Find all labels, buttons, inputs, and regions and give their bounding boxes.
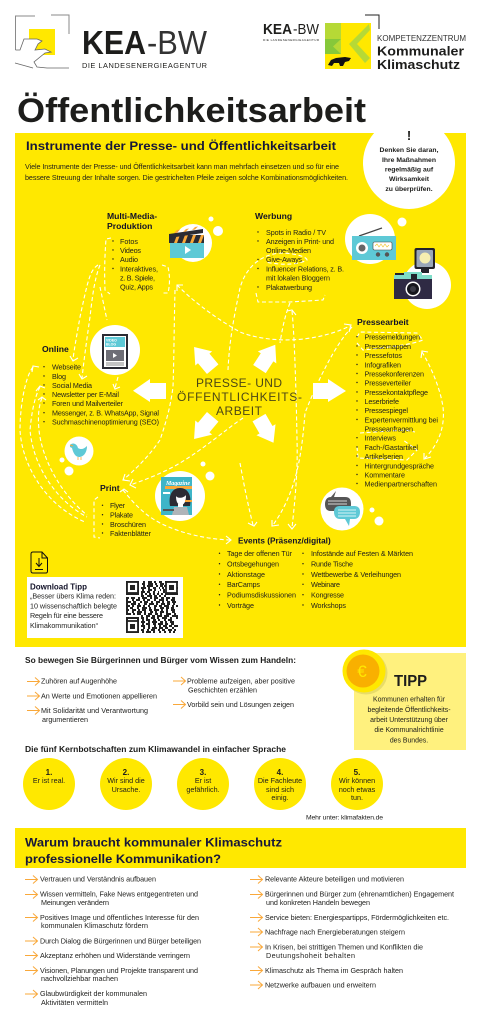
list: knowledge to action: Vorbild sein und Lösungen zeigen bbox=[187, 700, 294, 709]
download tip box: 10 wissenschaftlich belegte bbox=[30, 602, 117, 610]
section: Pressearbeit: Artikelserien bbox=[364, 452, 403, 461]
download tip box bbox=[27, 577, 183, 638]
section: Pressearbeit: Pressekonferenzen bbox=[364, 369, 424, 378]
icon: magazine: Magazine bbox=[165, 481, 190, 487]
core message 5 bbox=[331, 758, 383, 810]
section: Pressearbeit: Pressekontaktpflege bbox=[364, 388, 428, 397]
core message 3 bbox=[177, 758, 229, 810]
section: Werbung: Anzeigen in Print- und bbox=[266, 237, 334, 246]
list: knowledge to action bbox=[27, 677, 295, 724]
section: Events: Infostände auf Festen & Märkten bbox=[311, 549, 413, 558]
list: reasons left: Durch Dialog die Bürgerinnen und Bürger beteiligen bbox=[40, 936, 201, 945]
section: Print: Faktenblätter bbox=[110, 529, 152, 538]
panel: why communication heading: professionelle Kommunikation? bbox=[25, 852, 221, 866]
section: Pressearbeit: Pressespiegel bbox=[364, 406, 408, 415]
list: reasons left: kommunalen Klimaschutz fördern bbox=[41, 921, 148, 930]
tip box: begleitende Öffentlichkeits- bbox=[368, 706, 450, 714]
section: Events: Tage der offenen Tür bbox=[227, 549, 293, 558]
core message 2: Wir sind die bbox=[107, 776, 145, 785]
section: Online: Messenger, z. B. WhatsApp, Signal bbox=[52, 408, 159, 418]
section: Multi-Media-Produktion: z. B. Spiele, bbox=[120, 274, 155, 282]
logo: Kompetenzzentrum Kommunaler Klimaschutz: DIE LANDESENERGIEAGENTUR bbox=[263, 38, 320, 42]
list: reasons left: Glaubwürdigkeit der kommunalen bbox=[40, 989, 147, 998]
section: Pressearbeit: Medienpartnerschaften bbox=[364, 479, 437, 488]
section: Pressearbeit: Pressefotos bbox=[364, 351, 402, 360]
section: Events: Wettbewerbe & Verleihungen bbox=[311, 570, 401, 579]
section: Werbung: Werbung bbox=[255, 211, 292, 221]
section: Events: Aktionstage bbox=[227, 570, 265, 579]
section: Events: BarCamps bbox=[227, 580, 260, 589]
section: Events: Podiumsdiskussionen bbox=[227, 590, 296, 600]
core message 5: noch etwas bbox=[339, 785, 376, 794]
list: reasons right: Nachfrage nach Energieberatungen steigern bbox=[265, 928, 405, 936]
logo: Kompetenzzentrum Kommunaler Klimaschutz: Kommunaler bbox=[377, 44, 464, 58]
section: Pressearbeit: Interviews bbox=[364, 434, 396, 442]
section: Pressearbeit: Presseverteiler bbox=[364, 378, 412, 387]
callout: reminder: Wirksamkeit bbox=[389, 176, 430, 183]
panel: why communication heading bbox=[15, 828, 466, 868]
logo: KEA-BW: -BW bbox=[147, 24, 208, 61]
list: knowledge to action: argumentieren bbox=[42, 715, 88, 724]
icon: euro coin: € bbox=[357, 662, 367, 681]
core message 3: Er ist bbox=[195, 776, 211, 785]
core message 3: gefährlich. bbox=[186, 785, 220, 794]
section: Pressearbeit: Infografiken bbox=[364, 360, 401, 369]
section: Pressearbeit: Presseanfragen bbox=[364, 424, 413, 434]
title: Öffentlichkeitsarbeit bbox=[17, 92, 366, 130]
intro text: bessere Streuung der Inhalte sorgen. Die gestrichelten Pfeile zeigen solche Kombinationsmöglichkeiten. bbox=[25, 173, 348, 182]
section: Events: Events (Präsenz/digital) bbox=[238, 536, 331, 546]
icon: speech bubbles bbox=[320, 488, 384, 530]
panel heading: Instrumente der Presse- und Öffentlichkeitsarbeit bbox=[26, 140, 336, 153]
core message 4: sind sich bbox=[266, 785, 294, 794]
heading: knowledge to action: So bewegen Sie Bürgerinnen und Bürger vom Wissen zum Handeln: bbox=[25, 655, 296, 665]
section: Multi-Media-Produktion: Videos bbox=[120, 246, 141, 255]
core message 2 bbox=[100, 758, 152, 810]
core message 5: Wir können bbox=[339, 776, 375, 785]
list: knowledge to action: Probleme aufzeigen, aber positive bbox=[187, 677, 295, 686]
icon: radio bbox=[345, 214, 406, 264]
list: knowledge to action: Mit Solidarität und Verantwortung bbox=[41, 706, 148, 715]
big white arrows around centre bbox=[133, 339, 346, 448]
icon: bird bbox=[60, 436, 94, 476]
icon: video blog tablet: VIDEO bbox=[106, 338, 117, 342]
callout: reminder: Ihre Maßnahmen bbox=[382, 157, 436, 164]
core message 4: Die Fachleute bbox=[258, 776, 302, 785]
core message 2: Ursache. bbox=[112, 785, 140, 794]
section: Multi-Media-Produktion: Fotos bbox=[120, 237, 138, 246]
section: Events: Kongresse bbox=[311, 590, 344, 600]
logo: KEA-BW bbox=[15, 15, 208, 70]
centre label: ÖFFENTLICHKEITS- bbox=[177, 390, 302, 404]
section: Online: Newsletter per E-Mail bbox=[52, 390, 119, 399]
section: Events: Ortsbegehungen bbox=[227, 559, 279, 568]
download tip box: Klimakommunikation“ bbox=[30, 621, 99, 630]
list: reasons left: Akzeptanz erhöhen und Widerstände verringern bbox=[40, 951, 190, 960]
list: reasons left: Visionen, Planungen und Projekte transparent und bbox=[40, 966, 198, 975]
list: reasons right: In Krisen, bei strittigen Themen und Konflikten die bbox=[265, 942, 423, 952]
section: Werbung: Plakatwerbung bbox=[266, 283, 312, 292]
section: Online: Online bbox=[42, 344, 69, 354]
dashed arrows bbox=[20, 238, 443, 544]
section: Pressearbeit: Kommentare bbox=[364, 470, 405, 479]
icon: magazine bbox=[155, 462, 214, 521]
section: Online: Webseite bbox=[52, 362, 81, 372]
section: Pressearbeit: Expertenvermittlung bei bbox=[364, 415, 438, 424]
centre label: ARBEIT bbox=[216, 404, 263, 418]
logo: Kompetenzzentrum Kommunaler Klimaschutz: KEA bbox=[263, 21, 292, 38]
core message 4: 4. bbox=[277, 768, 283, 777]
tip box: arbeit Unterstützung über bbox=[370, 717, 449, 724]
section: Pressearbeit bbox=[356, 317, 438, 488]
section: Print: Flyer bbox=[110, 501, 126, 510]
section: Werbung bbox=[255, 211, 344, 292]
section: Print: Broschüren bbox=[110, 520, 146, 529]
section: Online bbox=[42, 344, 159, 426]
section: Werbung: mit lokalen Bloggern bbox=[266, 274, 330, 282]
section: Multi-Media-Produktion: Audio bbox=[120, 255, 138, 264]
section: Online: Suchmaschinenoptimierung (SEO) bbox=[52, 418, 159, 426]
core message 1: Er ist real. bbox=[33, 776, 65, 785]
download tip box: „Besser übers Klima reden: bbox=[30, 592, 116, 601]
section: Print bbox=[100, 483, 152, 538]
section: Pressearbeit: Fach-/Gastartikel bbox=[364, 443, 418, 452]
section: Werbung: Give-Aways bbox=[266, 255, 302, 264]
icon: video blog tablet bbox=[90, 325, 140, 375]
callout: reminder: ! bbox=[407, 128, 411, 143]
core message 2: 2. bbox=[123, 768, 129, 777]
icon: video blog tablet: BLOG bbox=[106, 342, 116, 346]
logo: Kompetenzzentrum Kommunaler Klimaschutz: KOMPETENZZENTRUM bbox=[377, 34, 466, 43]
section: Pressearbeit: Pressemeldungen bbox=[364, 332, 420, 342]
list: knowledge to action: An Werte und Emotionen appellieren bbox=[41, 691, 157, 700]
core message 5: 5. bbox=[354, 768, 360, 777]
tip box: die Kommunalrichtlinie bbox=[374, 727, 444, 734]
callout: reminder bbox=[363, 128, 455, 209]
section: Print: Plakate bbox=[110, 510, 133, 520]
icon: clapperboard bbox=[169, 216, 223, 262]
section: Events: Workshops bbox=[311, 601, 346, 610]
list: reasons left: Positives Image und öffentliches Interesse für den bbox=[40, 913, 199, 922]
list: reasons right: Service bieten: Energiespartipps, Fördermöglichkeiten etc. bbox=[265, 913, 449, 922]
core message 3: 3. bbox=[200, 768, 206, 777]
section: Werbung: Influencer Relations, z. B. bbox=[266, 264, 344, 274]
QR code bbox=[126, 582, 178, 632]
section: Pressearbeit: Pressearbeit bbox=[357, 317, 409, 327]
logo: Kompetenzzentrum Kommunaler Klimaschutz: -BW bbox=[293, 21, 320, 38]
list: reasons left: Vertrauen und Verständnis aufbauen bbox=[40, 874, 156, 884]
list: knowledge to action: Geschichten erzählen bbox=[188, 685, 257, 694]
callout: reminder: regelmäßig auf bbox=[385, 166, 434, 174]
list: reasons left: Meinungen verändern bbox=[41, 898, 109, 907]
list: reasons right bbox=[250, 874, 454, 990]
download tip box: Regeln für eine bessere bbox=[30, 611, 103, 620]
download tip box: Download Tipp bbox=[30, 582, 87, 592]
section: Print: Print bbox=[100, 483, 120, 493]
intro text bbox=[25, 162, 348, 182]
section: Online: Social Media bbox=[52, 381, 92, 390]
section: Multi-Media-Produktion: Multi-Media- bbox=[107, 211, 157, 221]
callout: reminder: Denken Sie daran, bbox=[380, 147, 439, 154]
list: reasons left: Aktivitäten vermitteln bbox=[41, 998, 108, 1007]
section: Werbung: Spots in Radio / TV bbox=[266, 228, 326, 237]
list: reasons right: Bürgerinnen und Bürger zum (ehrenamtlichen) Engagement bbox=[265, 890, 454, 898]
section: Pressearbeit: Hintergrundgespräche bbox=[364, 461, 434, 470]
list: reasons left: Wissen vermitteln, Fake News entgegentreten und bbox=[40, 890, 198, 898]
section: Multi-Media-Produktion bbox=[107, 211, 158, 292]
list: reasons right: Klimaschutz als Thema im Gespräch halten bbox=[265, 966, 403, 975]
tip box: TIPP bbox=[394, 673, 427, 690]
centre label bbox=[177, 376, 302, 418]
icon: download bbox=[31, 552, 48, 573]
logo: Kompetenzzentrum Kommunaler Klimaschutz bbox=[263, 15, 466, 72]
logo: Kompetenzzentrum Kommunaler Klimaschutz: Klimaschutz bbox=[377, 58, 460, 72]
list: reasons right: Relevante Akteure beteiligen und motivieren bbox=[265, 874, 404, 884]
list: reasons left bbox=[25, 874, 201, 1007]
section: Pressearbeit: Pressemappen bbox=[364, 342, 411, 351]
icon: camera bbox=[394, 248, 451, 309]
logo: KEA-BW: DIE LANDESENERGIEAGENTUR bbox=[82, 61, 207, 70]
section: Multi-Media-Produktion: Produktion bbox=[107, 221, 152, 231]
section: Events: Webinare bbox=[311, 580, 340, 589]
core message 4: einig. bbox=[271, 793, 289, 802]
section: Multi-Media-Produktion: Quiz, Apps bbox=[120, 282, 153, 292]
tip box: Kommunen erhalten für bbox=[373, 696, 446, 704]
list: knowledge to action: Zuhören auf Augenhöhe bbox=[41, 677, 117, 686]
tip box: des Bundes. bbox=[390, 738, 428, 744]
core message 4 bbox=[254, 758, 306, 810]
source note: Mehr unter: klimafakten.de bbox=[306, 814, 383, 822]
section: Online: Blog bbox=[52, 372, 66, 381]
panel: instruments bbox=[15, 128, 466, 647]
list: reasons left: nachvollziehbar machen bbox=[41, 974, 118, 983]
core message 1 bbox=[23, 758, 75, 810]
list: reasons right: Netzwerke aufbauen und erweitern bbox=[265, 980, 376, 990]
panel: why communication heading: Warum braucht kommunaler Klimaschutz bbox=[25, 836, 282, 850]
list: reasons right: Deutungshoheit behalten bbox=[266, 951, 355, 960]
intro text: Viele Instrumente der Presse- und Öffentlichkeitsarbeit kann man mehrfach einsetzen und so für eine bbox=[25, 162, 339, 171]
section: Multi-Media-Produktion: Interaktives, bbox=[120, 264, 158, 274]
callout: reminder: zu überprüfen. bbox=[385, 186, 433, 193]
section: Events bbox=[219, 536, 413, 610]
section: Events: Runde Tische bbox=[311, 559, 353, 568]
core message 5: tun. bbox=[351, 793, 363, 802]
tip box bbox=[342, 650, 466, 750]
section: Events: Vorträge bbox=[227, 601, 254, 610]
logo: KEA-BW: KEA bbox=[82, 24, 146, 61]
section: Werbung: Online-Medien bbox=[266, 246, 311, 255]
section: Pressearbeit: Leserbriefe bbox=[364, 397, 399, 406]
heading: five core messages: Die fünf Kernbotschaften zum Klimawandel in einfacher Sprache bbox=[25, 744, 286, 754]
section: Online: Foren und Mailverteiler bbox=[52, 399, 124, 408]
centre label: PRESSE- UND bbox=[196, 376, 282, 390]
list: reasons right: und konkreten Handeln bewegen bbox=[266, 898, 370, 907]
core message 1: 1. bbox=[46, 768, 52, 777]
